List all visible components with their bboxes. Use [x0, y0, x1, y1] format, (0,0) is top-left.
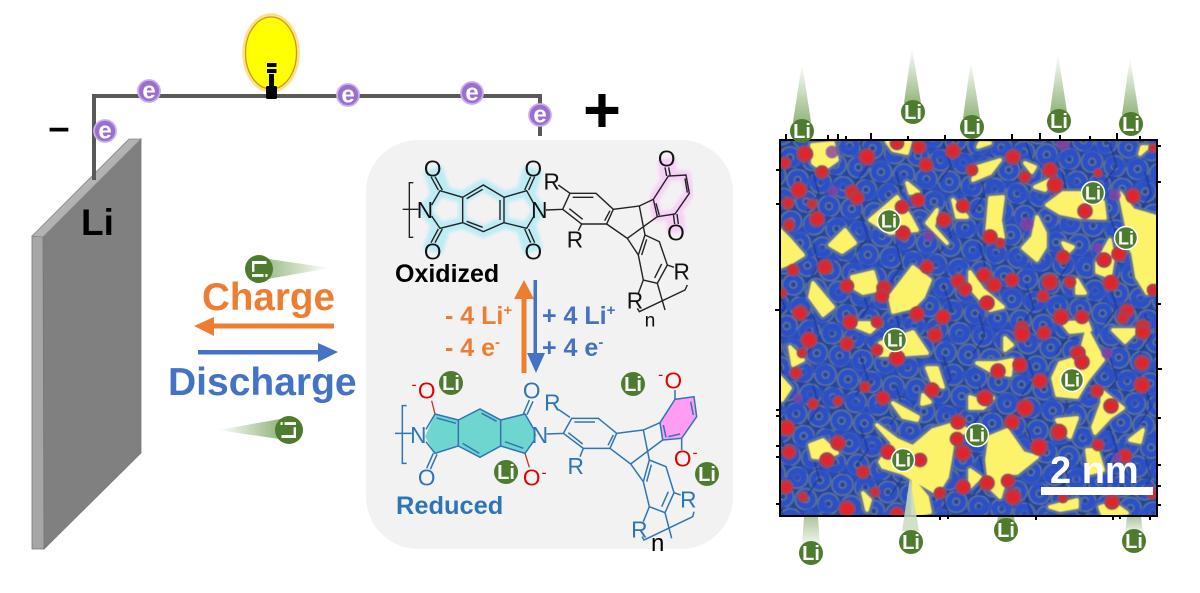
- oxidized molecule: R: [673, 258, 690, 284]
- lithium ion above box: 5: [1119, 57, 1143, 136]
- reduced molecule: -: [658, 366, 663, 383]
- reduced molecule: R: [631, 516, 648, 542]
- lithium ion above box: 5: Li: [1122, 114, 1140, 136]
- electron: wire top left: e: [142, 78, 156, 104]
- lithium on reduced molecule: upper right: [621, 372, 645, 396]
- oxidized molecule: O: [667, 220, 685, 246]
- oxidized molecule: O: [424, 155, 441, 181]
- lithium on reduced molecule: lower left: [494, 460, 518, 484]
- arrow: charge: [194, 317, 334, 336]
- label: minus 4 e: -: [495, 334, 500, 351]
- lithium ion below box: 2: [899, 530, 923, 554]
- oxidized molecule: O: [658, 145, 675, 171]
- electron: cathode lead: [529, 102, 551, 128]
- lithium ion above box: 2: [901, 47, 925, 124]
- arrow: oxidation up: [514, 280, 534, 373]
- reduced molecule: -: [411, 376, 417, 393]
- lithium on reduced molecule: lower right: Li: [698, 464, 716, 486]
- reduced molecule: O: [523, 378, 540, 404]
- panel: molecular simulation: [775, 133, 1162, 531]
- electron: wire left: e: [98, 118, 112, 144]
- lithium in pore: lower left: [892, 448, 919, 531]
- lithium in pore: upper left: Li: [881, 212, 897, 232]
- lithium ion below box: 1: [799, 517, 823, 565]
- reduced molecule: [395, 366, 698, 542]
- lithium in pore: lower centre: Li: [969, 426, 985, 446]
- lithium ion below box: 2: Li: [902, 532, 920, 554]
- reduced molecule: O: [674, 445, 691, 471]
- oxidized molecule: R: [627, 287, 643, 313]
- reduced molecule: -: [692, 444, 698, 461]
- reduced molecule: -: [541, 464, 547, 481]
- label: n: n: [651, 530, 664, 557]
- icon: light bulb: [244, 15, 298, 99]
- oxidized molecule: R: [567, 226, 583, 252]
- electron: wire right: [461, 80, 483, 106]
- electron: wire centre: e: [341, 82, 355, 108]
- lithium on reduced molecule: upper left: [439, 371, 463, 395]
- reduced molecule: R: [680, 486, 697, 512]
- lithium ion moving right: Li: [278, 421, 301, 439]
- panel: polymer redox: [366, 140, 733, 557]
- reduced molecule: R: [567, 453, 584, 479]
- label: plus 4 e: -: [598, 334, 603, 351]
- lithium ion moving left: [245, 255, 330, 283]
- lithium in pore: lower left: Li: [895, 450, 911, 470]
- lithium on reduced molecule: lower left: Li: [497, 462, 515, 484]
- label: Reduced: Reduced: [396, 492, 503, 520]
- reduced molecule: N: [532, 422, 548, 448]
- label: Li electrode: Li: [81, 202, 114, 243]
- label: plus 4 Li: +: [607, 302, 616, 319]
- reduced molecule: O: [665, 368, 682, 394]
- oxidized molecule: N: [531, 197, 548, 223]
- lithium in pore: right: [1114, 226, 1138, 250]
- label: Charge: Charge: [202, 276, 335, 319]
- arrow: reduction down: [527, 280, 545, 373]
- label: minus 4 Li: +: [503, 302, 512, 319]
- electron: wire top left: [138, 78, 160, 104]
- panel: lithium electrode plate: [32, 139, 141, 549]
- reduced molecule: N: [410, 422, 427, 448]
- reduced molecule: O: [418, 378, 435, 404]
- lithium in pore: centre right: [1060, 368, 1084, 392]
- lithium ion moving right: [218, 416, 303, 444]
- lithium ion above box: 3: Li: [963, 117, 981, 139]
- lithium ion above box: 3: [960, 60, 984, 139]
- electron: wire left: [94, 118, 116, 144]
- arrow: discharge: [198, 343, 338, 362]
- label: Oxidized: Oxidized: [395, 260, 499, 288]
- reduced molecule: O: [523, 464, 540, 490]
- scale bar: 2 nm: [1050, 450, 1139, 492]
- lithium ion above box: 1: [790, 63, 814, 143]
- label: Discharge: Discharge: [168, 361, 357, 404]
- reduced molecule: R: [544, 390, 561, 416]
- lithium on reduced molecule: upper left: Li: [442, 373, 460, 395]
- lithium ion below box: 4: [1122, 517, 1146, 553]
- lithium in pore: right: Li: [1118, 228, 1134, 248]
- lithium in pore: upper left: [878, 210, 900, 232]
- oxidized molecule: O: [525, 155, 542, 181]
- lithium ion below box: 3: [994, 517, 1018, 542]
- label: minus 4 Li: - 4 Li: [445, 302, 503, 330]
- oxidized molecule: N: [417, 197, 433, 223]
- lithium in pore: centre left: Li: [887, 330, 903, 350]
- electron: wire centre: [337, 82, 359, 108]
- lithium in pore: top right: Li: [1085, 184, 1101, 204]
- oxidized molecule: O: [525, 238, 542, 264]
- simulation box frame: [775, 133, 1162, 520]
- lithium in pore: lower centre: [966, 424, 988, 446]
- lithium ion moving left: Li: [247, 260, 270, 278]
- lithium ion above box: 2: Li: [904, 102, 922, 124]
- lithium on reduced molecule: lower right: [695, 462, 719, 486]
- label: plus 4 Li: + 4 Li: [542, 302, 607, 330]
- red oxygen sites: [778, 137, 1158, 520]
- lithium ion below box: 4: Li: [1125, 531, 1143, 553]
- circuit wire: [94, 96, 540, 180]
- oxidized molecule: O: [424, 238, 441, 264]
- lithium on reduced molecule: upper right: Li: [624, 374, 642, 396]
- oxidized molecule: [403, 145, 690, 332]
- electron: cathode lead: e: [533, 102, 547, 128]
- reduced molecule: O: [418, 464, 435, 490]
- minus sign: –: [48, 107, 70, 149]
- lithium ion below box: 3: Li: [997, 520, 1015, 542]
- oxidized molecule: R: [543, 168, 560, 194]
- electron: wire right: e: [465, 80, 479, 106]
- plus sign: +: [583, 73, 621, 146]
- lithium ion below box: 1: Li: [802, 543, 820, 565]
- lithium in pore: centre left: [884, 328, 906, 352]
- lithium ion above box: 4: [1047, 53, 1071, 133]
- lithium ion above box: 4: Li: [1050, 111, 1068, 133]
- lithium ion above box: 1: Li: [793, 121, 811, 143]
- oxidized molecule: n: [645, 311, 655, 332]
- label: minus 4 e: - 4 e: [445, 334, 495, 362]
- lithium in pore: top right: [1082, 182, 1104, 204]
- lithium in pore: centre right: Li: [1064, 370, 1080, 390]
- label: plus 4 e: + 4 e: [542, 334, 598, 362]
